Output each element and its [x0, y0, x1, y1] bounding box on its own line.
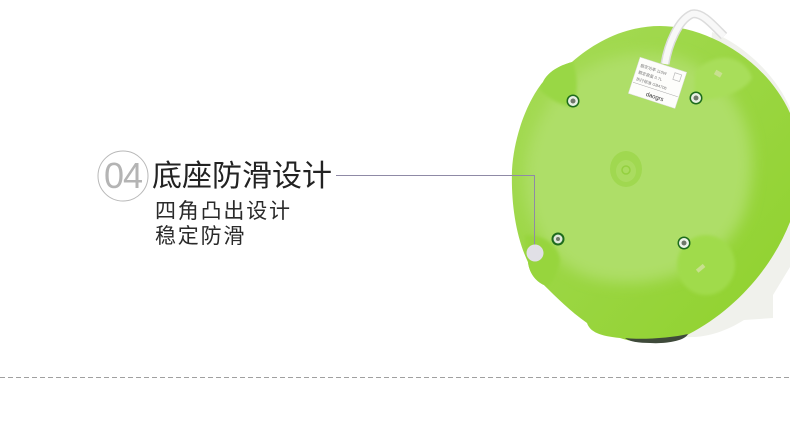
heading: 底座防滑设计: [152, 160, 332, 193]
centre button: [610, 151, 642, 187]
screws: [552, 92, 702, 250]
rubber foot: top right: [694, 58, 752, 100]
rating label sticker: [628, 57, 687, 108]
callout leader line: [336, 176, 534, 245]
divider: [0, 376, 790, 378]
number badge circle: [98, 151, 148, 201]
rating label sticker: daogrs: [645, 92, 664, 103]
rating label sticker: 额定容量 0.7L: [638, 69, 664, 82]
foot slots: [696, 70, 722, 273]
number 04: 04: [104, 155, 142, 196]
rating label sticker: 额定功率 110W: [640, 62, 668, 76]
power cord: [665, 14, 724, 64]
description: 四角凸出设计: [155, 200, 292, 223]
description: [155, 200, 292, 248]
callout dot: [526, 244, 544, 262]
rubber foot: bottom right: [677, 235, 735, 295]
description: 稳定防滑: [155, 225, 246, 248]
dark base underside: [625, 334, 688, 343]
rating label sticker: 执行标准 GB4706: [636, 75, 668, 91]
rubber foot: top left: [540, 60, 577, 107]
rubber foot: bottom left: [525, 235, 560, 288]
green base: [512, 26, 790, 343]
white kettle body: [686, 32, 790, 337]
base centre highlight: [525, 53, 752, 283]
